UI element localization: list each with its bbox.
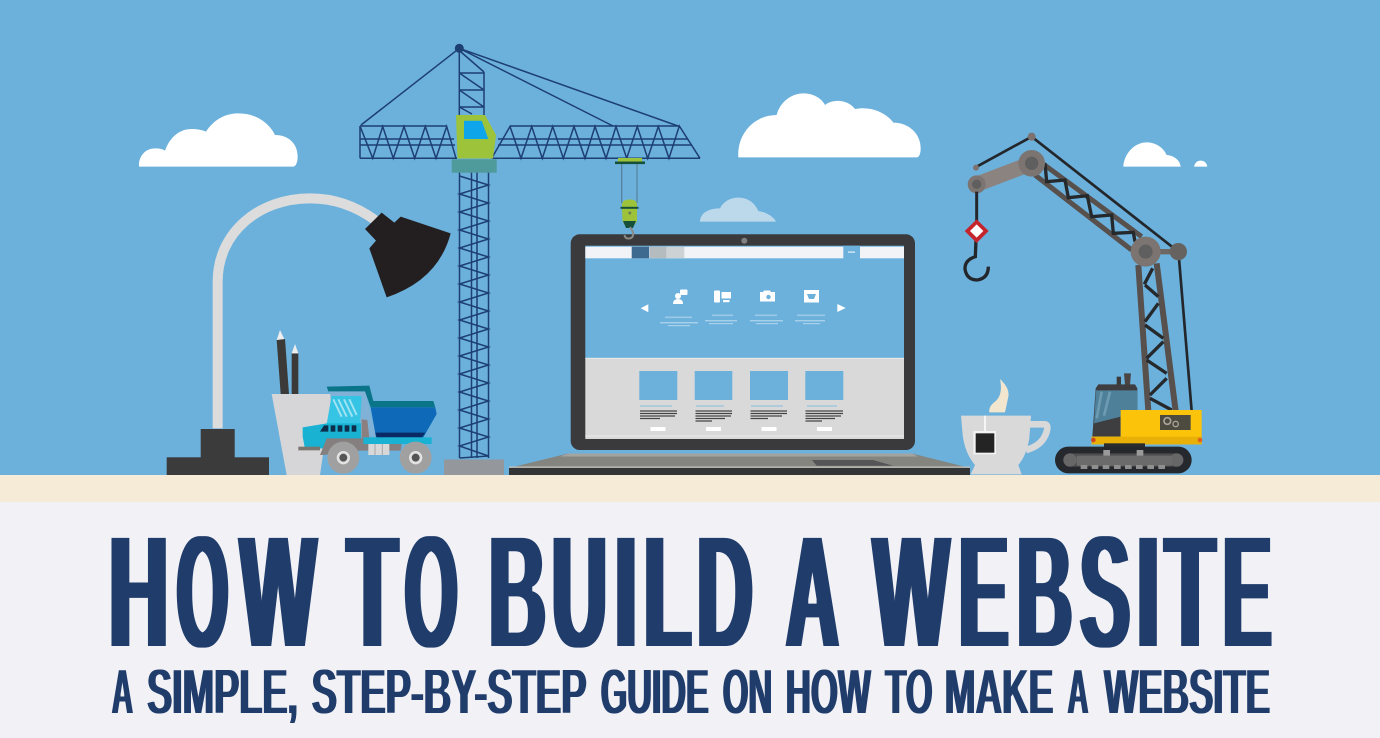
- website card 1: [639, 371, 677, 431]
- pencil cup: [272, 330, 332, 475]
- website nav bar: [585, 246, 904, 259]
- mobile crane: [965, 133, 1202, 473]
- title: How to build a website: O: [177, 500, 228, 683]
- crane upper mast: [459, 48, 484, 115]
- tower crane: [360, 44, 700, 476]
- crane cab: [456, 115, 496, 158]
- title: How to build a website: I: [1137, 500, 1159, 683]
- slider arrow right: [837, 304, 846, 312]
- steam: [989, 379, 1009, 412]
- truck rear wheel: [400, 442, 432, 474]
- feature icon: user: [660, 290, 698, 326]
- crane foot: [444, 460, 504, 476]
- title: How to build a website: I: [614, 500, 636, 683]
- title: How to build a website: A: [786, 500, 838, 683]
- truck grille: [320, 425, 356, 432]
- cup body: [961, 416, 1031, 474]
- subtitle: a simple, step-by-step guide: GUIDE: [601, 655, 709, 728]
- cloud: small pale: [700, 198, 776, 222]
- title: How to build a website: U: [552, 500, 607, 683]
- truck strut: [362, 419, 370, 444]
- crane pulleys: [968, 133, 1187, 267]
- title: How to build a website: B: [1017, 500, 1072, 683]
- truck window: [327, 396, 362, 424]
- desk lamp: [167, 198, 451, 475]
- feature icon: mail: [795, 290, 825, 324]
- subtitle: a simple, step-by-step guide: HOW: [786, 655, 871, 728]
- laptop lid: [571, 234, 915, 450]
- laptop base: [509, 454, 970, 475]
- title panel background: [0, 502, 1380, 738]
- title: How to build a website: H: [109, 500, 168, 683]
- cup body: [272, 394, 332, 475]
- dump truck: [298, 386, 437, 474]
- lamp base: [167, 429, 269, 475]
- title: How to build a website: D: [697, 500, 752, 683]
- title: How to build a website: O: [405, 500, 458, 683]
- crane hook block: [615, 158, 645, 238]
- pencils: [277, 330, 298, 394]
- crane operator cab: [1092, 373, 1137, 437]
- truck dump bed: [371, 407, 437, 437]
- cloud: right pair: [1123, 142, 1207, 167]
- laptop: [509, 234, 970, 475]
- crane cables: [977, 137, 1192, 411]
- tea tag: [973, 416, 996, 454]
- website hero: [585, 246, 904, 359]
- title: How to build a website: W: [240, 500, 316, 683]
- website lower section: [585, 358, 904, 439]
- subtitle: a simple, step-by-step guide: MAKE: [945, 655, 1053, 728]
- sky background: [0, 0, 1380, 476]
- truck front wheel: [327, 442, 359, 474]
- crane turntable: [452, 159, 497, 173]
- crane top ball: [455, 44, 464, 53]
- title: How to build a website: [109, 500, 1272, 683]
- truck chassis: [298, 437, 432, 455]
- title: How to build a website: T: [1165, 500, 1215, 683]
- title: How to build a website: W: [873, 500, 950, 683]
- slider arrow left: [641, 304, 648, 312]
- truck rear frame: [330, 391, 377, 437]
- crane lower mast: [460, 172, 488, 458]
- crane left jib: [360, 126, 457, 158]
- website card 2: [695, 371, 732, 431]
- title: How to build a website: E: [959, 500, 1009, 683]
- gear panel: [1160, 415, 1191, 430]
- cloud: left: [139, 113, 298, 167]
- subtitle: a simple, step-by-step guide: STEP-BY-STEP: [312, 655, 587, 728]
- boom bracing: [1045, 163, 1135, 242]
- subtitle: a simple, step-by-step guide: [112, 655, 1270, 728]
- subtitle: a simple, step-by-step guide: SIMPLE,: [147, 655, 298, 728]
- mast bracing: [1144, 268, 1172, 410]
- crane yellow body: [1091, 410, 1202, 444]
- crane right jib: [492, 126, 700, 158]
- title: How to build a website: E: [1223, 500, 1271, 683]
- truck hood: [303, 423, 361, 449]
- title: How to build a website: T: [347, 500, 398, 683]
- joint link: [1146, 244, 1178, 260]
- crane hook: [965, 192, 989, 280]
- truck canopy: [327, 386, 435, 407]
- title: How to build a website: B: [489, 500, 546, 683]
- lamp shade: [365, 213, 451, 297]
- subtitle: a simple, step-by-step guide: A: [1068, 655, 1088, 728]
- website card 4: [805, 371, 843, 431]
- feature icon: camera: [750, 290, 783, 324]
- title: How to build a website: L: [644, 500, 692, 683]
- subtitle: a simple, step-by-step guide: TO: [885, 655, 933, 728]
- lamp arm: [218, 198, 375, 428]
- tea cup: [961, 379, 1047, 474]
- crane cables: [361, 48, 678, 126]
- feature icon: devices: [705, 290, 737, 324]
- subtitle: a simple, step-by-step guide: ON: [723, 655, 772, 728]
- boom chords: [1035, 162, 1142, 250]
- crawler track: [1055, 443, 1192, 473]
- crane jib arm: [977, 163, 1032, 184]
- cloud: centre large: [738, 93, 921, 157]
- desk surface: [0, 475, 1380, 502]
- laptop camera: [741, 238, 747, 244]
- subtitle: a simple, step-by-step guide: A: [112, 655, 133, 728]
- mast chords: [1138, 263, 1176, 411]
- cup handle: [1026, 424, 1047, 450]
- website card 3: [750, 371, 788, 431]
- title: How to build a website: S: [1080, 500, 1130, 683]
